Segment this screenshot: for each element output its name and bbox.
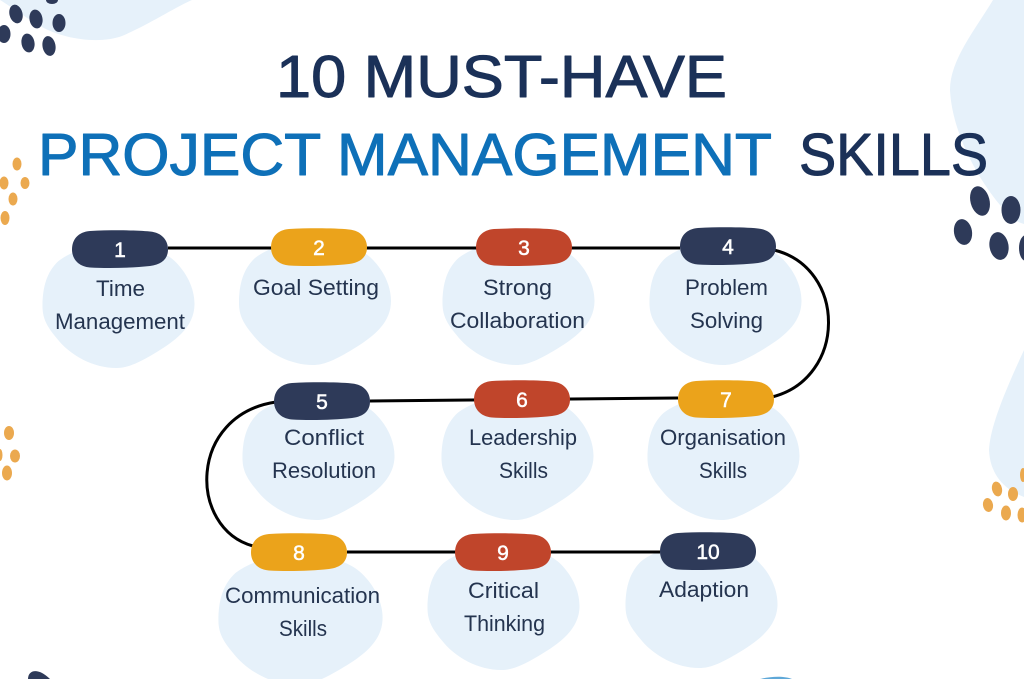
step 8: Communication Skills [225, 533, 380, 641]
blob panels behind the skills [42, 241, 802, 679]
label 8: Communication [225, 583, 380, 608]
label 1 [55, 276, 185, 334]
decorative blob: top left [0, 0, 192, 40]
step 6: Leadership Skills [469, 380, 577, 483]
label 2: Goal Setting [253, 275, 379, 300]
label 5: Conflict [284, 425, 364, 450]
badge 2: 2 [313, 237, 325, 260]
step 2: Goal Setting [253, 228, 379, 300]
step 10: Adaption [659, 532, 756, 602]
connector path linking steps 1 to 10 [168, 248, 829, 552]
decorative blob: top right [950, 0, 1024, 224]
badge 5: 5 [316, 391, 328, 414]
label 4 [685, 275, 768, 333]
step 1: Time Management [55, 230, 185, 334]
step 4: Problem Solving [680, 227, 776, 333]
badge 1: 1 [114, 239, 126, 262]
label 4: Problem [685, 275, 768, 300]
label 10: Adaption [659, 577, 749, 602]
step 7: Organisation Skills [660, 380, 786, 483]
decorative corner mark: bottom left [28, 671, 50, 679]
label 9 [464, 578, 545, 636]
label 6: Skills [499, 458, 548, 483]
decorative dots: orange right [982, 468, 1024, 522]
title [38, 44, 988, 188]
badge 10: 10 [696, 541, 720, 564]
decorative corner mark: bottom centre [760, 677, 792, 679]
label 3: Strong [483, 275, 552, 300]
label 1: Time [96, 276, 145, 301]
label 8: Skills [279, 616, 327, 641]
badge 8 [251, 533, 347, 571]
step 3: Strong Collaboration [450, 228, 585, 333]
label 3 [450, 275, 585, 333]
label 9: Thinking [464, 611, 545, 636]
label 8 [225, 583, 380, 641]
decorative dots: orange upper left [0, 158, 30, 225]
title line 1: 10 MUST-HAVE [276, 44, 727, 110]
title line 2: blue words: PROJECT MANAGEMENT [38, 122, 772, 188]
label 4: Solving [690, 308, 763, 333]
label 6 [469, 425, 577, 483]
decorative dots: navy top left [0, 0, 66, 57]
badge 4: 4 [722, 236, 734, 259]
badge 7: 7 [720, 389, 732, 412]
badge 6: 6 [516, 389, 528, 412]
label 7: Skills [699, 458, 747, 483]
decorative dots: orange middle left [0, 426, 20, 480]
label 7: Organisation [660, 425, 786, 450]
step 5: Conflict Resolution [272, 382, 376, 483]
label 6: Leadership [469, 425, 577, 450]
step 9: Critical Thinking [455, 533, 551, 636]
label 1: Management [55, 309, 185, 334]
label 5 [272, 425, 376, 483]
label 5: Resolution [272, 458, 376, 483]
badge 8: 8 [293, 542, 305, 565]
decorative blob: middle right [989, 350, 1024, 497]
label 3: Collaboration [450, 308, 585, 333]
badge 3: 3 [518, 237, 530, 260]
badge 9: 9 [497, 542, 509, 565]
label 9: Critical [468, 578, 539, 603]
decorative dots: navy right [952, 184, 1024, 261]
title line 2: navy word: SKILLS [799, 122, 988, 188]
label 7 [660, 425, 786, 483]
